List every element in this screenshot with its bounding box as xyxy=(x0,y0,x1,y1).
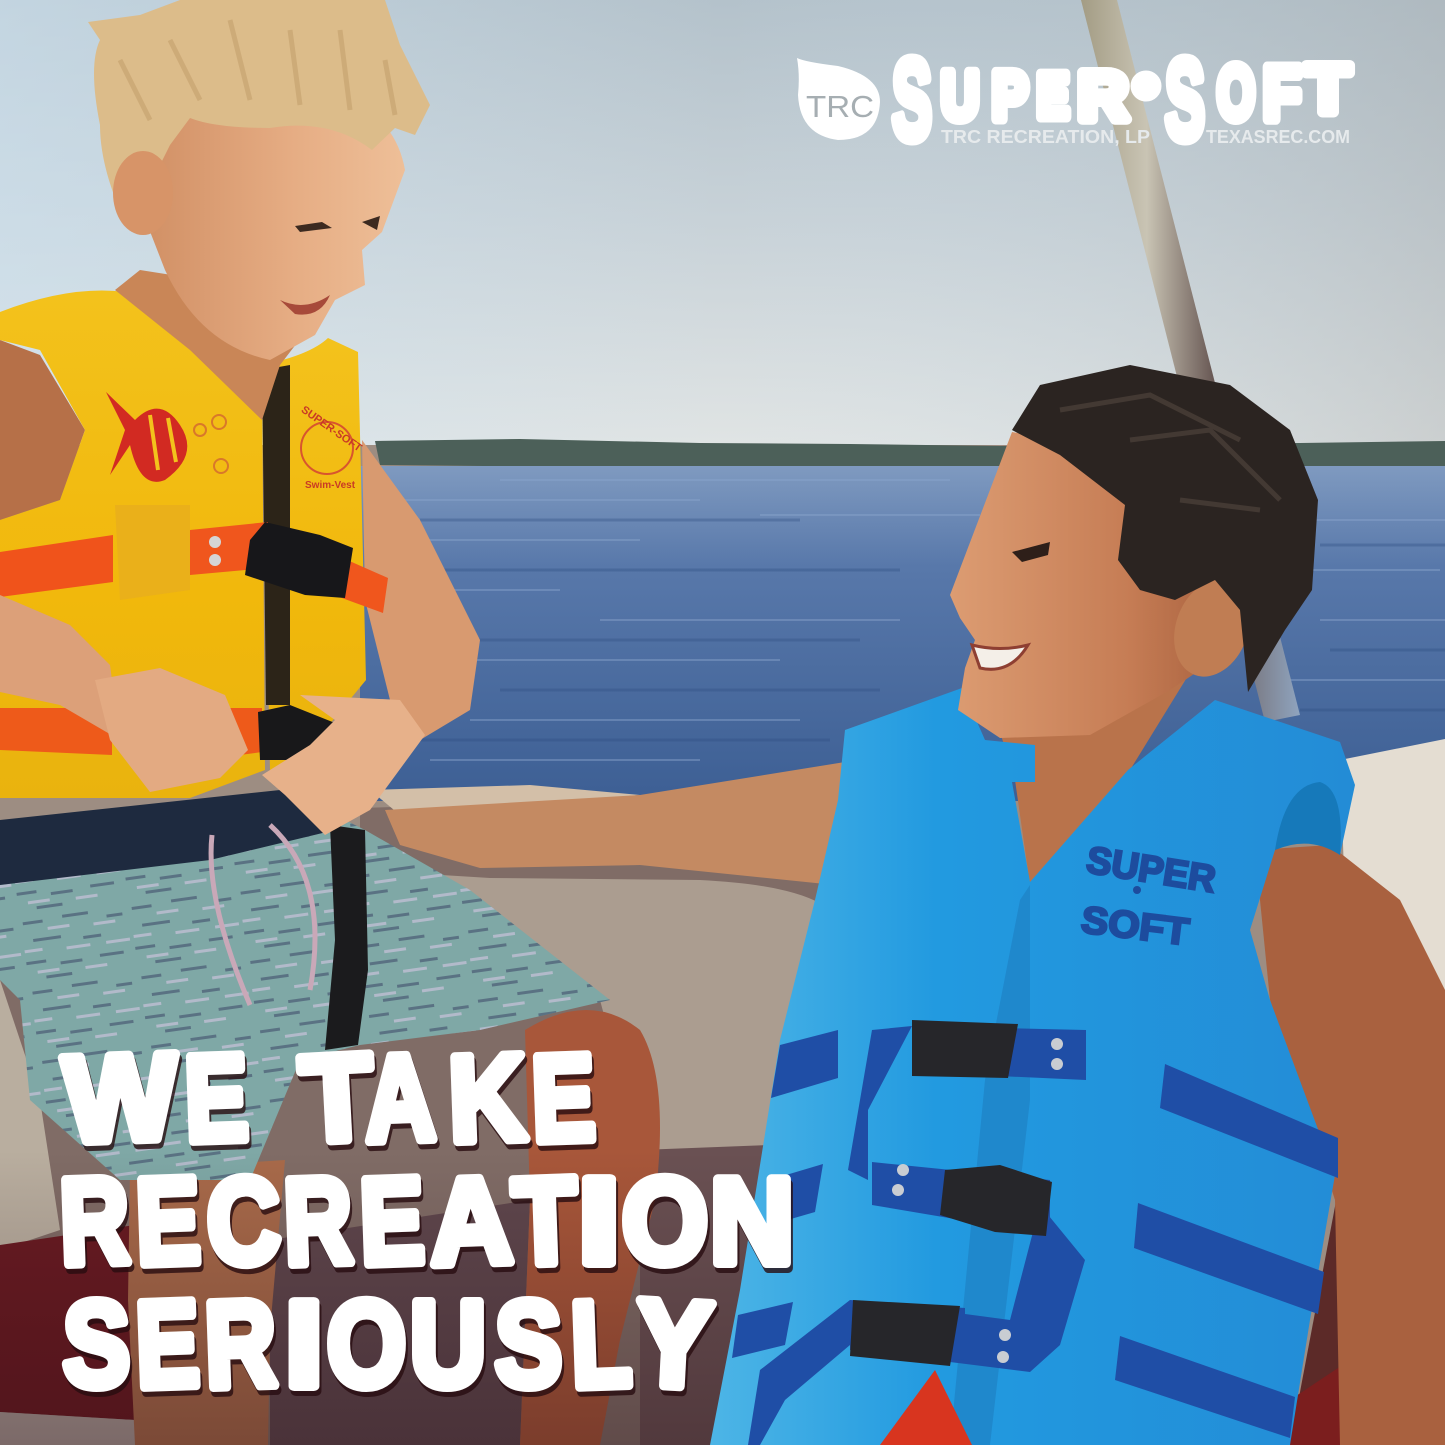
headline line 3: O xyxy=(327,1276,406,1412)
headline line 1: W xyxy=(62,1028,180,1168)
red swim trunks xyxy=(880,1370,972,1445)
left boy: blond hair xyxy=(88,0,430,228)
vest navy straps xyxy=(732,1026,1338,1445)
logo: Super Soft wordmark: S xyxy=(892,37,932,164)
bottom shade xyxy=(0,1150,780,1445)
left boy: yellow life vest xyxy=(0,291,388,798)
logo: TRC teardrop xyxy=(797,58,880,140)
left boy: shorts xyxy=(0,790,610,1180)
headline line 2: I xyxy=(578,1153,620,1289)
logo: TRC teardrop: TRC xyxy=(806,89,874,124)
left boy: head and neck xyxy=(115,80,405,420)
vest badge xyxy=(299,404,364,491)
logo: Super Soft wordmark xyxy=(892,37,1350,164)
strap rivets xyxy=(892,1038,1063,1363)
right boy: blue life vest xyxy=(710,688,1355,1445)
headline line 3: L xyxy=(569,1275,633,1413)
left boy: ear xyxy=(113,151,173,235)
background: distant treeline xyxy=(375,439,1445,474)
logo: Super Soft wordmark: P xyxy=(992,58,1028,134)
logo: tagline: TEXASREC.COM xyxy=(1206,127,1350,147)
vest printed logo: SOFT xyxy=(1079,899,1191,954)
right boy: face and ear xyxy=(950,432,1263,738)
vest fish logo xyxy=(106,392,228,482)
vest badge: Swim-Vest xyxy=(305,480,356,491)
background: lake water xyxy=(360,466,1445,801)
headline line 3 xyxy=(63,1274,716,1414)
vest black buckles xyxy=(850,1020,1052,1366)
logo: tagline xyxy=(941,127,1350,147)
boat white gunwale xyxy=(1340,739,1445,1020)
logo: Super Soft wordmark: E xyxy=(1037,62,1069,131)
vest printed logo xyxy=(1079,839,1219,954)
left boy: forearm and hands over strap xyxy=(0,595,425,835)
boat pole xyxy=(1081,0,1300,722)
right boy: outstretched arm xyxy=(385,762,845,885)
headline line 3: I xyxy=(285,1276,323,1412)
headline xyxy=(58,1028,794,1414)
logo: Super Soft wordmark: R xyxy=(1078,58,1128,134)
logo: Super Soft wordmark: O xyxy=(1217,51,1255,136)
orange chest strap and buckle xyxy=(0,522,388,613)
headline line 3: U xyxy=(410,1276,486,1412)
headline line 2: C xyxy=(205,1152,282,1290)
right boy: neck xyxy=(990,640,1210,885)
logo: Super Soft wordmark: S xyxy=(1165,37,1205,164)
boat upholstered seat xyxy=(0,772,1445,1445)
logo: Super Soft wordmark: U xyxy=(941,58,979,134)
logo xyxy=(797,37,1350,164)
headline line 2 xyxy=(58,1152,794,1290)
headline line 3: R xyxy=(203,1275,278,1413)
left boy: arms xyxy=(0,340,480,740)
headline line 2: R xyxy=(58,1152,131,1290)
headline line 2: O xyxy=(622,1153,708,1289)
headline line 1: E xyxy=(183,1029,250,1167)
orange waist strap and buckle xyxy=(0,705,340,760)
headline line 1 xyxy=(62,1028,597,1168)
headline line 1: E xyxy=(530,1029,597,1167)
headline line 3: E xyxy=(134,1275,201,1413)
headline line 1: T xyxy=(297,1028,376,1168)
headline line 2: R xyxy=(282,1152,354,1290)
logo: tagline: TRC RECREATION, LP xyxy=(941,127,1150,147)
headline line 3: S xyxy=(495,1276,562,1412)
vest badge: SUPER-SOFT xyxy=(299,404,364,455)
headline line 1: A xyxy=(363,1029,437,1167)
vest printed logo: SUPER xyxy=(1084,839,1219,901)
headline line 3: Y xyxy=(633,1274,716,1414)
left boy: legs xyxy=(128,1010,660,1445)
logo: Super Soft wordmark: T xyxy=(1306,51,1350,127)
headline line 1: K xyxy=(447,1029,528,1167)
background: sky xyxy=(0,0,1445,445)
headline line 2: E xyxy=(358,1152,426,1290)
right boy: dark hair xyxy=(1012,365,1318,692)
right boy: right arm xyxy=(1255,845,1445,1445)
headline line 3: S xyxy=(63,1276,130,1412)
logo: Super Soft wordmark: F xyxy=(1263,51,1301,136)
headline line 2: T xyxy=(511,1152,579,1290)
headline line 2: N xyxy=(710,1153,794,1289)
headline line 2: E xyxy=(134,1152,202,1290)
headline line 2: A xyxy=(428,1152,514,1290)
